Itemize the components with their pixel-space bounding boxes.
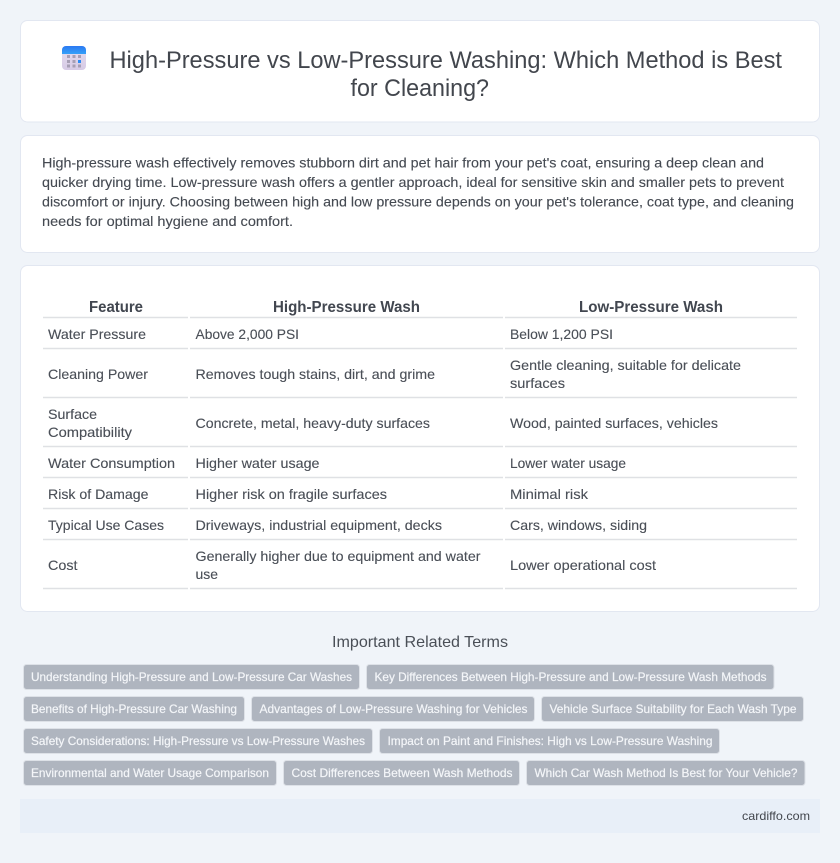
title [110, 47, 782, 102]
tag [24, 760, 276, 786]
row: surface compatibility: Concrete, metal, heavy-duty surfaces [196, 415, 430, 431]
tag [380, 728, 720, 754]
related term tags [24, 664, 805, 786]
row: risk of damage [48, 486, 589, 502]
title: High-Pressure vs Low-Pressure Washing: Which Method is Best [110, 47, 782, 74]
tag: Environmental and Water Usage Comparison [31, 766, 269, 780]
row: cleaning power: surfaces [510, 375, 565, 391]
footer bar [20, 799, 820, 833]
icon: calendar [62, 46, 86, 70]
row: surface compatibility [48, 406, 718, 440]
tag [284, 760, 520, 786]
tag: Vehicle Surface Suitability for Each Wash Type [550, 702, 797, 716]
panel: intro paragraph [20, 136, 820, 252]
row: water pressure: Above 2,000 PSI [196, 326, 299, 342]
tag: Cost Differences Between Wash Methods [292, 766, 512, 780]
row: water pressure: Below 1,200 PSI [510, 326, 613, 342]
footer text: cardiffo.com [742, 809, 810, 823]
row: cleaning power [48, 357, 741, 391]
table header: Feature [89, 299, 143, 316]
intro text: High-pressure wash effectively removes stubborn dirt and pet hair from your pet's coat, ensuring a deep clean and [42, 154, 764, 170]
row: cost: Lower operational cost [510, 557, 656, 573]
tag: Which Car Wash Method Is Best for Your Vehicle? [534, 766, 798, 780]
intro text: discomfort or injury. Choosing between high and low pressure depends on your pet's tolerance, coat type, and cleaning [42, 194, 794, 210]
tag: Safety Considerations: High-Pressure vs Low-Pressure Washes [31, 734, 365, 748]
row: surface compatibility: Compatibility [48, 424, 132, 440]
tag: Impact on Paint and Finishes: High vs Low-Pressure Washing [388, 734, 712, 748]
tag [366, 664, 774, 690]
row: water pressure: Water Pressure [48, 326, 146, 342]
row: cost: use [196, 566, 218, 582]
row: typical use cases [48, 517, 647, 533]
row: water consumption: Lower water usage [510, 455, 626, 471]
panel: comparison table [20, 266, 820, 612]
row: risk of damage: Minimal risk [510, 486, 589, 502]
tag: Benefits of High-Pressure Car Washing [31, 702, 237, 716]
tag [24, 696, 244, 722]
tag: Advantages of Low-Pressure Washing for Vehicles [260, 702, 528, 716]
row: cost [48, 548, 656, 582]
title: for Cleaning? [350, 75, 489, 102]
intro text [42, 154, 794, 229]
row: water consumption: Higher water usage [196, 455, 320, 471]
row: typical use cases: Cars, windows, siding [510, 517, 647, 533]
row: typical use cases: Driveways, industrial equipment, decks [196, 517, 442, 533]
row: cleaning power: Cleaning Power [48, 366, 148, 382]
tag: Key Differences Between High-Pressure and Low-Pressure Wash Methods [374, 670, 766, 684]
table header: Low-Pressure Wash [579, 299, 723, 316]
table header [89, 299, 723, 316]
heading: important related terms: Important Related Terms [332, 634, 508, 651]
row: water consumption [48, 455, 626, 471]
tag: Understanding High-Pressure and Low-Pressure Car Washes [31, 670, 352, 684]
intro text: needs for optimal hygiene and comfort. [42, 213, 293, 229]
row: cost: Generally higher due to equipment and water [196, 548, 481, 564]
row: cleaning power: Gentle cleaning, suitable for delicate [510, 357, 741, 373]
tag [526, 760, 805, 786]
row: risk of damage: Higher risk on fragile surfaces [196, 486, 387, 502]
tag [542, 696, 804, 722]
table header: High-Pressure Wash [273, 299, 420, 316]
row: water pressure [48, 326, 613, 342]
row: cost: Cost [48, 557, 78, 573]
row: risk of damage: Risk of Damage [48, 486, 149, 502]
row: surface compatibility: Surface [48, 406, 97, 422]
row: typical use cases: Typical Use Cases [48, 517, 164, 533]
row: cleaning power: Removes tough stains, dirt, and grime [196, 366, 435, 382]
tag [24, 664, 360, 690]
row: surface compatibility: Wood, painted surfaces, vehicles [510, 415, 718, 431]
row: water consumption: Water Consumption [48, 455, 175, 471]
tag [24, 728, 372, 754]
panel: title card [20, 20, 820, 122]
tag [252, 696, 534, 722]
intro text: quicker drying time. Low-pressure wash offers a gentler approach, ideal for sensitive skin and smaller pets to prevent [42, 174, 784, 190]
